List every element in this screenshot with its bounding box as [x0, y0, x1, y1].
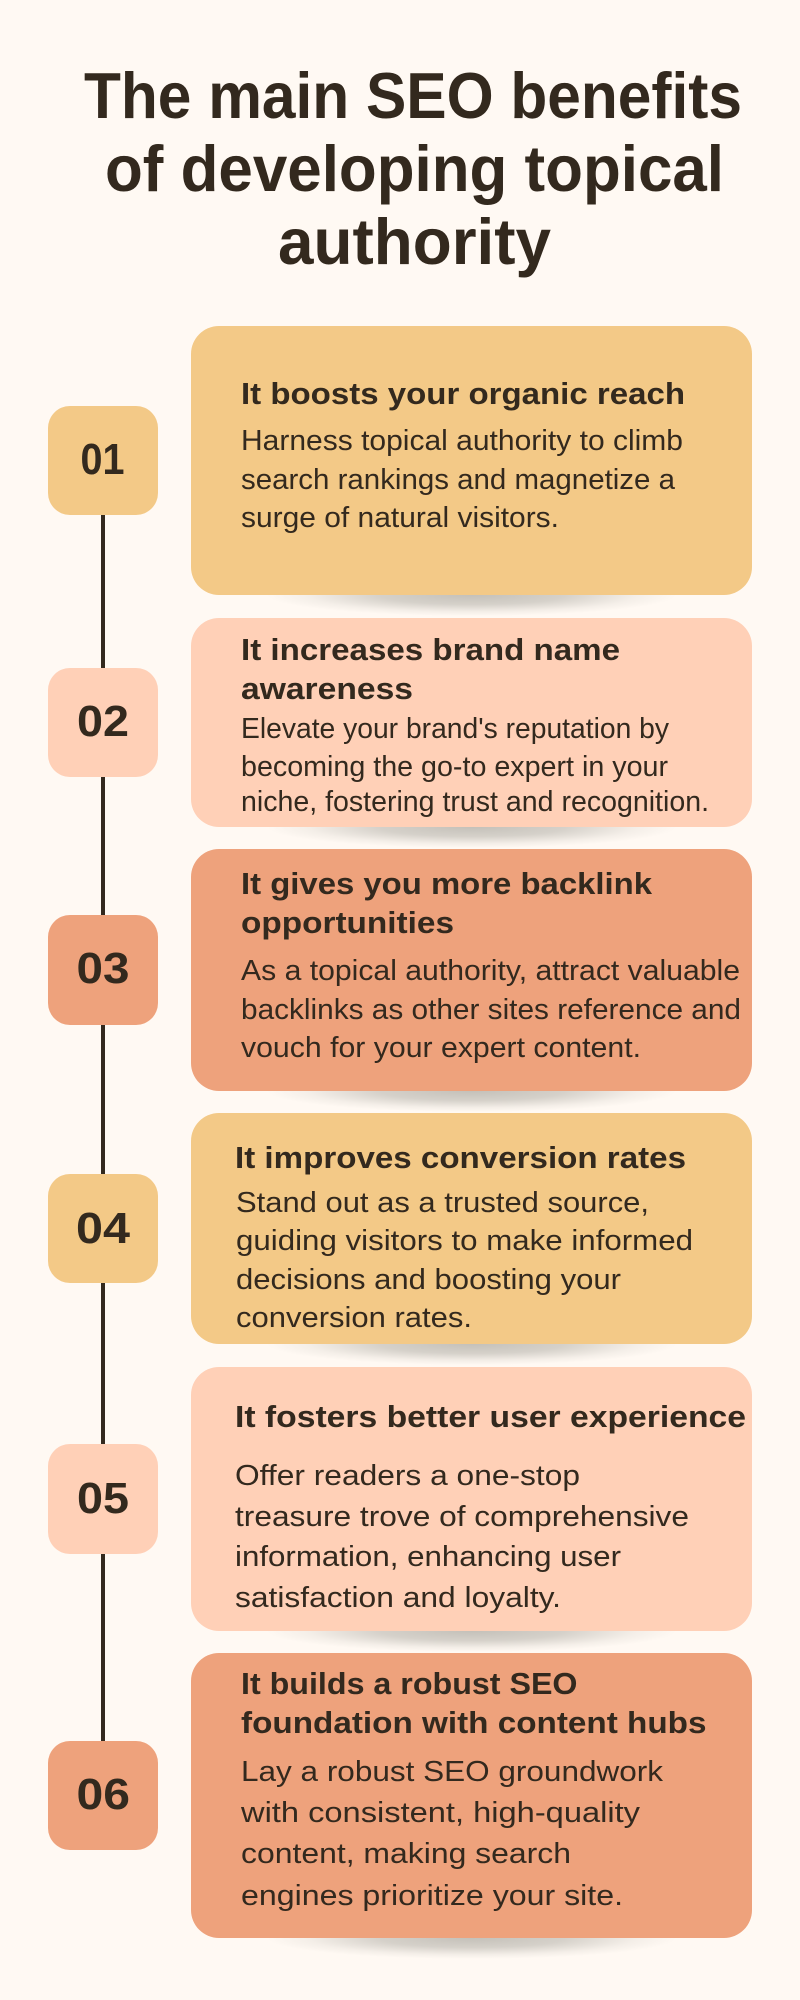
panel: benefit 1: It boosts your organic reach	[241, 376, 685, 411]
panel: benefit 2: It increases brand name	[241, 632, 620, 667]
number badge 06: 06	[76, 1770, 130, 1819]
panel: benefit 6: foundation with content hubs	[241, 1705, 706, 1740]
panel: benefit 4	[191, 1113, 752, 1365]
number badge 04	[48, 1174, 158, 1283]
title	[84, 59, 742, 278]
panel: benefit 5: Offer readers a one-stop	[235, 1460, 580, 1492]
number badge 05	[48, 1444, 158, 1554]
panel: benefit 5: treasure trove of comprehensive	[235, 1501, 689, 1533]
panel: benefit 2: Elevate your brand's reputation by	[241, 713, 670, 745]
number badge 01: 01	[80, 435, 124, 484]
panel: benefit 1: Harness topical authority to climb	[241, 425, 683, 457]
panel: benefit 6: content, making search	[241, 1838, 571, 1870]
number badge 03: 03	[76, 944, 130, 993]
panel: benefit 2: becoming the go-to expert in your	[241, 751, 669, 783]
panel: benefit 3: backlinks as other sites reference and	[241, 994, 741, 1026]
panel: benefit 5: satisfaction and loyalty.	[235, 1582, 561, 1614]
panel: benefit 6: Lay a robust SEO groundwork	[241, 1756, 664, 1788]
number badge 06	[48, 1741, 158, 1850]
panel: benefit 5: It fosters better user experience	[235, 1399, 746, 1434]
panel: benefit 3: As a topical authority, attract valuable	[241, 955, 740, 987]
panel: benefit 4: decisions and boosting your	[236, 1264, 622, 1296]
panel: benefit 3	[191, 849, 752, 1112]
panel: benefit 4: guiding visitors to make informed	[236, 1225, 693, 1257]
number badge 03	[48, 915, 158, 1025]
title: of developing topical	[105, 132, 724, 205]
panel: benefit 4: conversion rates.	[236, 1302, 472, 1334]
title: authority	[278, 205, 551, 278]
panel: benefit 3: vouch for your expert content.	[241, 1032, 641, 1064]
number badge 02: 02	[77, 697, 129, 746]
timeline connector line	[101, 515, 105, 1741]
panel: benefit 3: It gives you more backlink	[241, 866, 653, 901]
panel: benefit 5: information, enhancing user	[235, 1541, 622, 1573]
panel: benefit 2: awareness	[241, 671, 413, 706]
panel: benefit 6: engines prioritize your site.	[241, 1880, 623, 1912]
panel: benefit 6: It builds a robust SEO	[241, 1666, 578, 1701]
number badge 05: 05	[77, 1474, 129, 1523]
number badge 01	[48, 406, 158, 515]
panel: benefit 2	[191, 618, 752, 848]
panel: benefit 4: It improves conversion rates	[235, 1140, 686, 1175]
title: The main SEO benefits	[84, 59, 742, 132]
panel: benefit 1: surge of natural visitors.	[241, 502, 559, 534]
panel: benefit 1: search rankings and magnetize a	[241, 464, 675, 496]
panel: benefit 6	[191, 1653, 752, 1959]
panel: benefit 1	[191, 326, 752, 616]
panel: benefit 2: niche, fostering trust and recognition.	[241, 786, 709, 818]
number badge 02	[48, 668, 158, 777]
panel: benefit 4: Stand out as a trusted source,	[236, 1187, 649, 1219]
number badge 04: 04	[76, 1204, 131, 1253]
panel: benefit 6: with consistent, high-quality	[240, 1797, 641, 1829]
panel: benefit 5	[191, 1367, 752, 1652]
panel: benefit 3: opportunities	[241, 905, 454, 940]
